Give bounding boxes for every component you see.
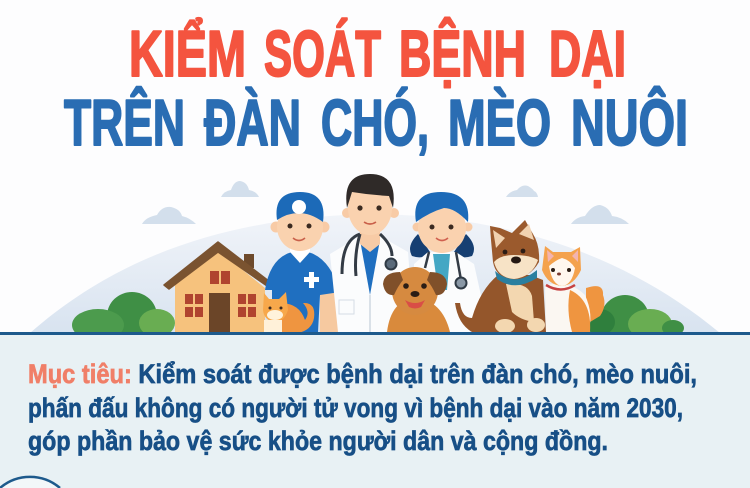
title: KIỂM [129, 17, 246, 90]
figure: female vet [410, 192, 482, 332]
icon: brown puppy [383, 267, 450, 332]
figure: male vet in blue scrubs [265, 192, 340, 332]
title: ĐÀN [204, 86, 301, 159]
title: TRÊN [64, 86, 185, 159]
icon: orange and white cat with red collar [542, 246, 604, 332]
icon: bushes left [72, 292, 175, 341]
title: CHÓ, [321, 86, 429, 159]
title: DẠI [549, 17, 626, 90]
icon: circle outline cut off at bottom [0, 477, 60, 488]
text block: objective statement [28, 359, 697, 456]
icon: orange cat by house [263, 292, 314, 333]
title [64, 17, 688, 159]
icon: bushes right [585, 295, 684, 341]
icon: house [164, 242, 274, 332]
illustration: background hill [30, 214, 720, 333]
title: NUÔI [571, 86, 688, 159]
title: BỆNH [399, 17, 526, 90]
panel: objective [0, 332, 750, 488]
icon: clouds [142, 181, 629, 224]
text block: objective statement: góp phần bảo vệ sức khỏe người dân và cộng đồng. [28, 426, 608, 456]
title: SOÁT [264, 17, 381, 90]
title: MÈO [448, 86, 551, 159]
icon: large brown dog with teal collar [455, 220, 546, 333]
figure: male doctor with stethoscope [330, 174, 414, 332]
